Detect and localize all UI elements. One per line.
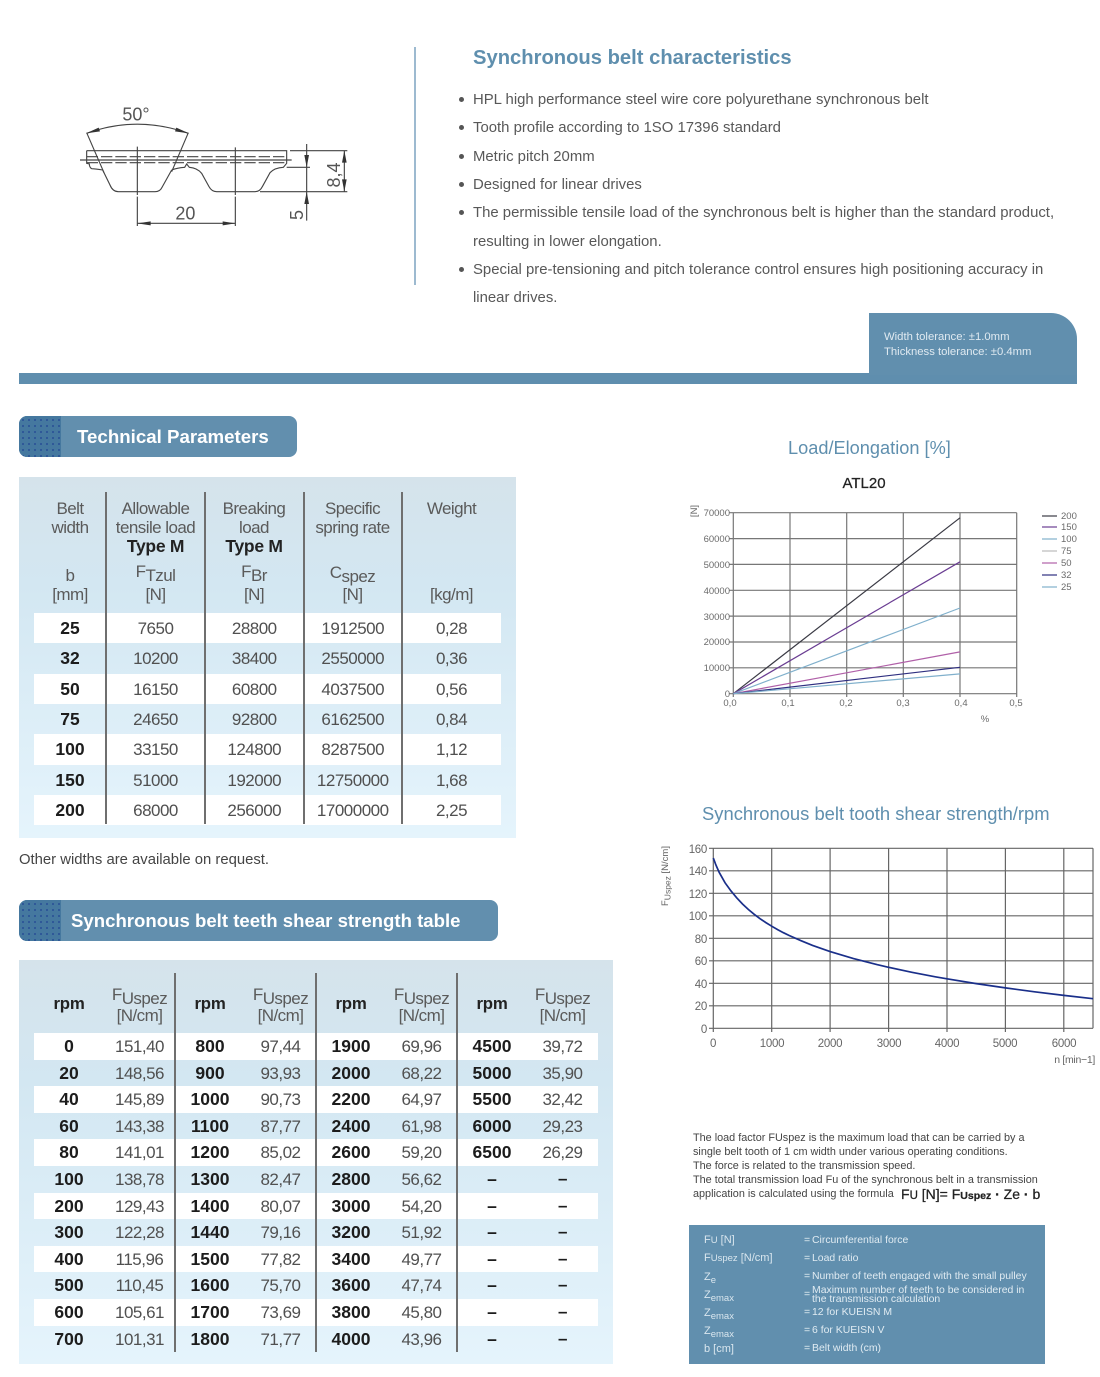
table rows: 1700: [191, 1302, 229, 1322]
section header: teeth shear strength table: [19, 900, 498, 941]
table rows: 75,70: [260, 1276, 301, 1295]
table rows: 69,96: [401, 1037, 442, 1056]
table rows: 600: [54, 1302, 84, 1322]
table rows: 0,56: [436, 680, 467, 699]
table rows: 101,31: [115, 1330, 164, 1349]
table rows: 61,98: [401, 1117, 442, 1136]
note: other widths: Other widths are available on request.: [19, 852, 269, 868]
table header cells: Belt: [56, 499, 84, 518]
elongation lines: [733, 518, 960, 694]
table rows: –: [558, 1222, 567, 1241]
table rows: 56,62: [401, 1170, 442, 1189]
x axis labels: 0,2: [839, 698, 853, 709]
legend: 100: [1061, 534, 1077, 545]
feature bullet list: Designed for linear drives: [473, 177, 642, 193]
table rows: 2800: [332, 1169, 370, 1189]
x axis labels: 0,3: [896, 698, 910, 709]
table rows: 68,22: [401, 1064, 442, 1083]
x axis labels: 3000: [877, 1038, 901, 1050]
belt tooth profile drawing: 20: [175, 203, 195, 223]
section header: technical parameters: Technical Parameters: [77, 426, 269, 447]
table rows: –: [487, 1329, 497, 1349]
x axis labels: 2000: [818, 1038, 842, 1050]
y axis labels: 80: [695, 934, 707, 946]
table rows: 5500: [473, 1089, 511, 1109]
table header cells: b: [66, 566, 74, 585]
table rows: 150: [55, 770, 85, 790]
table header cells: [N]: [145, 585, 166, 604]
curve: [713, 858, 1093, 999]
tolerance text: Thickness tolerance: ±0.4mm: [884, 346, 1031, 358]
table rows: 16150: [133, 680, 178, 699]
y axis labels: 160: [689, 844, 707, 856]
table header cells: Breaking: [223, 499, 285, 518]
table rows: 4500: [473, 1036, 511, 1056]
symbol legend box: =: [804, 1289, 810, 1300]
symbol legend box: Load ratio: [812, 1253, 858, 1264]
heading: tooth shear strength chart: Synchronous belt tooth shear strength/rpm: [702, 803, 1050, 824]
table rows: 97,44: [260, 1037, 301, 1056]
belt tooth profile drawing: 5: [287, 210, 307, 220]
symbol legend box: Zemax: [704, 1325, 734, 1340]
x axis labels: 0,4: [954, 698, 968, 709]
table rows: 141,01: [115, 1143, 164, 1162]
table rows: 1600: [191, 1275, 229, 1295]
symbol legend box: Maximum number of teeth to be considered in: [812, 1285, 1024, 1296]
table rows: 75: [60, 709, 80, 729]
table rows: 28800: [232, 619, 277, 638]
symbol legend box: Circumferential force: [812, 1235, 908, 1246]
table rows: –: [558, 1169, 567, 1188]
symbol legend box: Zemax: [704, 1289, 734, 1304]
x axis labels: 0,1: [781, 698, 795, 709]
y axis labels: 120: [689, 889, 707, 901]
table header cells: Allowable: [122, 499, 189, 518]
section header: teeth shear strength table: Synchronous belt teeth shear strength table: [71, 910, 461, 931]
load factor explanation text: The load factor FUspez is the maximum load that can be carried by a: [693, 1132, 1024, 1144]
legend: 32: [1061, 570, 1072, 581]
table rows: 6000: [473, 1116, 511, 1136]
table rows: 33150: [133, 740, 178, 759]
table rows: 3600: [332, 1275, 370, 1295]
table rows: 24650: [133, 710, 178, 729]
y axis labels: 140: [689, 866, 707, 878]
table rows: 200: [54, 1196, 84, 1216]
table rows: 300: [54, 1222, 84, 1242]
symbol legend box: =: [804, 1235, 810, 1246]
symbol legend box: Ze: [704, 1271, 716, 1286]
table header cells: FUspez: [394, 985, 449, 1008]
formula: FU [N]= FUspez · Ze · b: [901, 1186, 1040, 1202]
table rows: 47,74: [401, 1276, 442, 1295]
table rows: 90,73: [260, 1090, 301, 1109]
table rows: 145,89: [115, 1090, 164, 1109]
table rows: 1200: [191, 1142, 229, 1162]
table rows: –: [558, 1196, 567, 1215]
table rows: 124800: [227, 740, 281, 759]
table rows: [34, 613, 501, 825]
table header cells: spring rate: [315, 518, 390, 537]
table rows: –: [558, 1249, 567, 1268]
table header cells: [N]: [244, 585, 264, 604]
table header cells: FUspez: [535, 985, 590, 1008]
symbol legend box: FUspez [N/cm]: [704, 1252, 773, 1264]
table rows: 400: [54, 1249, 84, 1269]
y axis labels: 10000: [704, 663, 730, 674]
table rows: 17000000: [317, 801, 389, 820]
table rows: 59,20: [401, 1143, 442, 1162]
table rows: –: [558, 1329, 567, 1348]
load factor explanation text: [693, 1132, 1040, 1202]
table rows: 79,16: [260, 1223, 301, 1242]
legend: 200: [1061, 511, 1077, 522]
table rows: 60800: [232, 680, 277, 699]
heading: load/elongation chart: Load/Elongation [%]: [788, 438, 951, 458]
table rows: 45,80: [401, 1303, 442, 1322]
heading: synchronous belt characteristics: Synchronous belt characteristics: [473, 47, 792, 69]
table rows: 12750000: [317, 771, 389, 790]
symbol legend box: the transmission calculation: [812, 1294, 940, 1305]
table rows: 4000: [332, 1329, 370, 1349]
table rows: 93,93: [260, 1064, 301, 1083]
symbol legend box: 6 for KUEISN V: [812, 1325, 885, 1336]
table rows: 2600: [332, 1142, 370, 1162]
table rows: 77,82: [260, 1250, 301, 1269]
table rows: 1500: [191, 1249, 229, 1269]
table rows: –: [487, 1169, 497, 1189]
shear strength curve chart: [660, 844, 1095, 1066]
table rows: 51000: [133, 771, 178, 790]
table rows: 100: [54, 1169, 84, 1189]
table rows: 64,97: [401, 1090, 442, 1109]
tolerance text: Width tolerance: ±1.0mm: [884, 331, 1010, 343]
x axis labels: 1000: [760, 1038, 784, 1050]
legend: 50: [1061, 558, 1072, 569]
table rows: 3800: [332, 1302, 370, 1322]
legend: 75: [1061, 546, 1072, 557]
table rows: 20: [59, 1063, 79, 1083]
table rows: –: [487, 1275, 497, 1295]
legend: 25: [1061, 582, 1072, 593]
table rows: 32,42: [542, 1090, 583, 1109]
table rows: 2,25: [436, 801, 467, 820]
table header cells: rpm: [53, 994, 85, 1013]
feature bullet list: Special pre-tensioning and pitch tolerance control ensures high positioning accuracy in: [473, 262, 1043, 278]
table rows: 71,77: [260, 1330, 301, 1349]
table rows: 3400: [332, 1249, 370, 1269]
feature bullet list: HPL high performance steel wire core polyurethane synchronous belt: [473, 92, 929, 108]
y axis labels: 60000: [704, 534, 730, 545]
table rows: 54,20: [401, 1197, 442, 1216]
table header cells: FUspez: [112, 985, 167, 1008]
table header cells: tensile load: [116, 518, 195, 537]
load factor explanation text: The total transmission load Fu of the synchronous belt in a transmission: [693, 1174, 1038, 1186]
table header cells: FBr: [241, 562, 267, 585]
y axis labels: 100: [689, 911, 707, 923]
load factor explanation text: single belt tooth of 1 cm width under various operating conditions.: [693, 1146, 1008, 1158]
table header cells: Type M: [225, 536, 283, 556]
table rows: 700: [54, 1329, 84, 1349]
table header cells: [kg/m]: [430, 585, 473, 604]
y axis labels: 70000: [704, 508, 730, 519]
table header cells: Weight: [427, 499, 476, 518]
table rows: [34, 1033, 598, 1349]
symbol legend box: [689, 1225, 1045, 1364]
table rows: –: [487, 1249, 497, 1269]
table header cells: load: [239, 518, 269, 537]
table rows: 1,12: [436, 740, 467, 759]
x axis labels: %: [981, 714, 990, 725]
y axis labels: [689, 844, 707, 1036]
table header cells: Cspez: [330, 563, 375, 586]
belt tooth profile drawing: 50°: [122, 105, 150, 125]
symbol legend box: =: [804, 1307, 810, 1318]
y axis title: F: [660, 900, 671, 906]
symbol legend box: Belt width (cm): [812, 1343, 881, 1354]
legend: 150: [1061, 522, 1077, 533]
table rows: 82,47: [260, 1170, 301, 1189]
y axis title: [N/cm]: [660, 846, 671, 876]
load factor explanation text: application is calculated using the formula: [693, 1188, 894, 1200]
load elongation line chart: [689, 475, 1077, 725]
table rows: 80,07: [260, 1197, 301, 1216]
x axis labels: 6000: [1052, 1038, 1076, 1050]
load factor explanation text: The force is related to the transmission speed.: [693, 1160, 915, 1172]
table rows: 115,96: [116, 1250, 163, 1269]
y axis labels: 50000: [704, 560, 730, 571]
divider line: [414, 47, 416, 285]
table header cells: [N/cm]: [117, 1006, 162, 1025]
chart title: ATL20: [842, 475, 886, 492]
y axis labels: 20000: [704, 637, 730, 648]
section header: technical parameters: [19, 416, 297, 457]
table rows: 92800: [232, 710, 277, 729]
table rows: 6162500: [321, 710, 384, 729]
table rows: 60: [59, 1116, 79, 1136]
symbol legend box: Zemax: [704, 1307, 734, 1322]
table rows: 85,02: [260, 1143, 301, 1162]
table rows: 38400: [232, 649, 277, 668]
table rows: 1,68: [436, 771, 467, 790]
table header cells: rpm: [335, 994, 367, 1013]
table rows: 122,28: [115, 1223, 164, 1242]
table rows: 1300: [191, 1169, 229, 1189]
table rows: 26,29: [542, 1143, 583, 1162]
table rows: 29,23: [542, 1117, 583, 1136]
table rows: 151,40: [115, 1037, 164, 1056]
table rows: 1800: [191, 1329, 229, 1349]
x axis labels: 0: [710, 1038, 716, 1050]
table header cells: FTzul: [136, 562, 175, 585]
feature bullet list: Metric pitch 20mm: [473, 149, 595, 165]
table rows: 2200: [332, 1089, 370, 1109]
table rows: 39,72: [542, 1037, 583, 1056]
table header cells: Type M: [127, 536, 184, 556]
table rows: 5000: [473, 1063, 511, 1083]
table rows: 200: [55, 800, 85, 820]
table rows: 0: [64, 1036, 74, 1056]
y axis labels: 20: [695, 1001, 707, 1013]
table rows: 192000: [227, 771, 281, 790]
table rows: 0,84: [436, 710, 467, 729]
table header cells: [mm]: [52, 585, 88, 604]
symbol legend box: =: [804, 1253, 810, 1264]
table rows: 80: [59, 1142, 79, 1162]
table rows: 100: [55, 739, 85, 759]
table rows: 3200: [332, 1222, 370, 1242]
table rows: 800: [195, 1036, 225, 1056]
table rows: 73,69: [260, 1303, 301, 1322]
table header cells: [N/cm]: [540, 1006, 585, 1025]
table header cells: [N/cm]: [258, 1006, 303, 1025]
table rows: 138,78: [115, 1170, 164, 1189]
table rows: 1000: [191, 1089, 229, 1109]
symbol legend box: =: [804, 1271, 810, 1282]
table rows: –: [487, 1222, 497, 1242]
symbol legend box: =: [804, 1343, 810, 1354]
y axis labels: 40000: [704, 586, 730, 597]
table rows: 110,45: [116, 1276, 163, 1295]
table rows: 10200: [133, 649, 178, 668]
table rows: 87,77: [260, 1117, 301, 1136]
table rows: 8287500: [321, 740, 384, 759]
table header cells: [N]: [342, 585, 363, 604]
table rows: 148,56: [115, 1064, 164, 1083]
feature bullet list: Tooth profile according to 1SO 17396 standard: [473, 120, 781, 136]
table rows: 105,61: [115, 1303, 164, 1322]
y axis labels: 40: [695, 979, 707, 991]
table rows: 49,77: [401, 1250, 442, 1269]
x axis labels: 0,5: [1009, 698, 1023, 709]
y axis title: Uspez: [662, 876, 672, 900]
table rows: –: [558, 1275, 567, 1294]
legend: [1042, 511, 1077, 593]
table rows: 1400: [191, 1196, 229, 1216]
table rows: 3000: [332, 1196, 370, 1216]
y axis labels: 0: [725, 689, 730, 700]
table header cells: rpm: [194, 994, 226, 1013]
feature bullet list: linear drives.: [473, 290, 557, 306]
table rows: 1912500: [321, 619, 384, 638]
table rows: 1900: [332, 1036, 370, 1056]
table rows: 2400: [332, 1116, 370, 1136]
table header cells: FUspez: [253, 985, 308, 1008]
x axis labels: [N]: [689, 505, 700, 517]
x axis labels: [710, 1038, 1095, 1066]
symbol legend box: 12 for KUEISN M: [812, 1307, 892, 1318]
table rows: 68000: [133, 801, 178, 820]
table rows: 2000: [332, 1063, 370, 1083]
table rows: 7650: [138, 619, 173, 638]
x axis labels: 0,0: [723, 698, 737, 709]
table rows: 35,90: [542, 1064, 583, 1083]
x axis labels: 5000: [993, 1038, 1017, 1050]
teeth shear strength table: [19, 960, 613, 1364]
table rows: 1100: [191, 1116, 229, 1136]
table rows: 0,36: [436, 649, 467, 668]
table rows: 25: [60, 618, 80, 638]
table header cells: width: [52, 518, 88, 537]
table rows: 50: [60, 679, 80, 699]
table header cells: rpm: [476, 994, 508, 1013]
table rows: 129,43: [115, 1197, 164, 1216]
y axis labels: 0: [701, 1024, 707, 1036]
tolerance text: [884, 331, 1031, 358]
symbol legend box: Number of teeth engaged with the small pulley: [812, 1271, 1027, 1282]
symbol legend box: =: [804, 1325, 810, 1336]
table rows: 43,96: [401, 1330, 442, 1349]
table rows: –: [487, 1196, 497, 1216]
table header cells: [53, 985, 590, 1025]
x axis labels: [689, 505, 1023, 725]
x axis labels: 4000: [935, 1038, 959, 1050]
table rows: 143,38: [115, 1117, 164, 1136]
feature bullet list: The permissible tensile load of the synchronous belt is higher than the standard product,: [473, 205, 1054, 221]
table rows: –: [487, 1302, 497, 1322]
feature bullet list: resulting in lower elongation.: [473, 234, 662, 250]
table rows: 6500: [473, 1142, 511, 1162]
x axis labels: n [min−1]: [1054, 1054, 1095, 1066]
table rows: 500: [54, 1275, 84, 1295]
table rows: 4037500: [321, 680, 384, 699]
symbol legend box: FU [N]: [704, 1234, 735, 1246]
feature bullet list: [459, 92, 1054, 306]
table header cells: [52, 499, 477, 604]
belt tooth profile drawing: 8,4: [324, 162, 344, 188]
symbol legend box: b [cm]: [704, 1343, 734, 1355]
table rows: 256000: [227, 801, 281, 820]
y axis labels: 30000: [704, 612, 730, 623]
y axis labels: 60: [695, 956, 707, 968]
table rows: 0,28: [436, 619, 467, 638]
table rows: –: [558, 1302, 567, 1321]
technical parameters table: [19, 477, 516, 838]
belt tooth profile drawing: [80, 105, 348, 226]
table rows: 900: [195, 1063, 225, 1083]
table rows: 2550000: [321, 649, 384, 668]
table rows: 32: [60, 648, 80, 668]
tolerance band and tab: [19, 313, 1077, 384]
table rows: 51,92: [401, 1223, 442, 1242]
y axis labels: [704, 508, 730, 700]
table header cells: Specific: [325, 499, 380, 518]
table rows: 1440: [191, 1222, 229, 1242]
table header cells: [N/cm]: [399, 1006, 444, 1025]
table rows: 40: [59, 1089, 79, 1109]
